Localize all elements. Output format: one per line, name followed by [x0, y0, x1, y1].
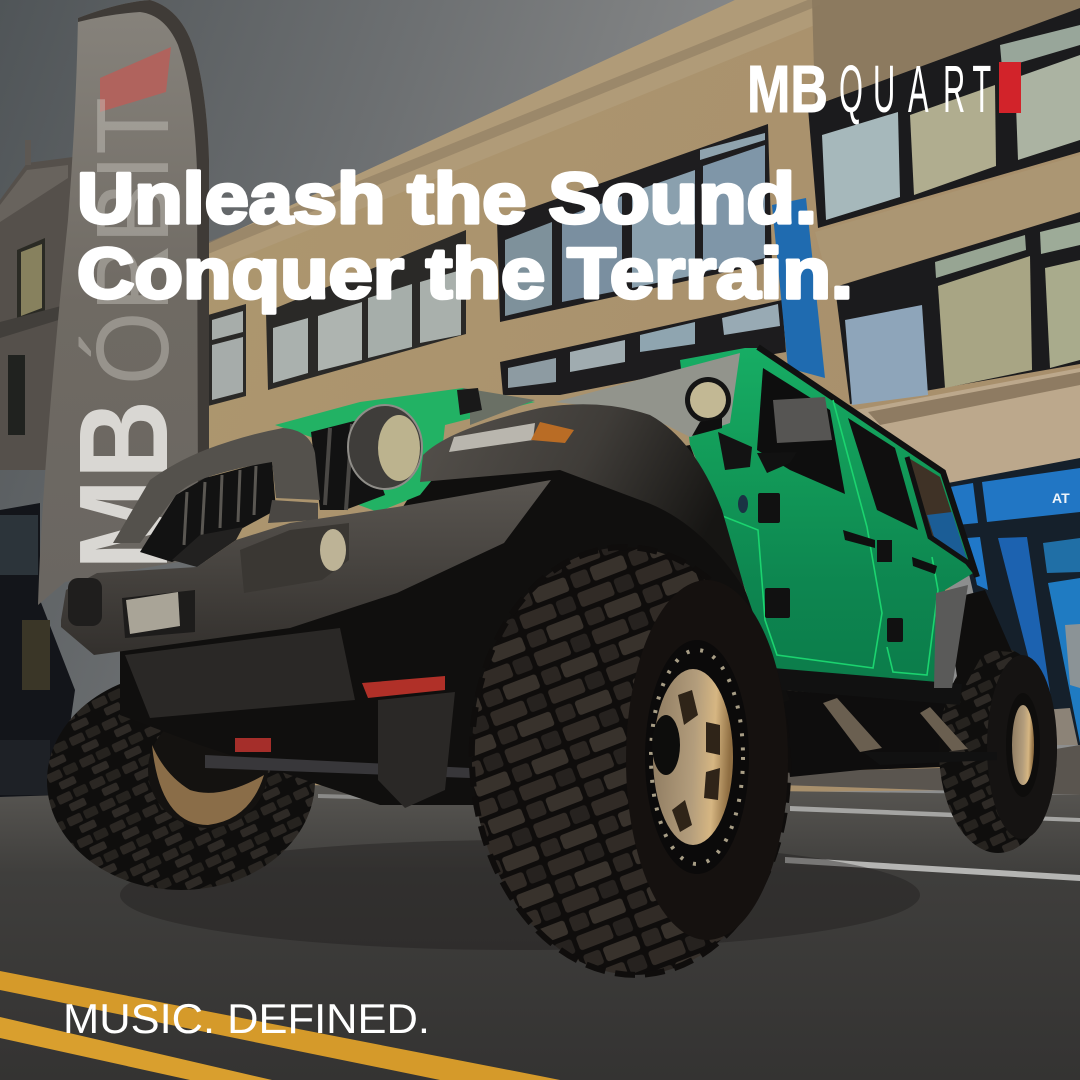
logo red block [999, 62, 1021, 113]
rear underbody [780, 690, 997, 777]
left front tire [47, 672, 315, 890]
logo wordmark MB: MB [747, 52, 828, 127]
body side doors [680, 348, 975, 686]
fog lamp [320, 529, 346, 571]
storefront: AT [1052, 490, 1070, 506]
tagline: MUSIC. DEFINED. [63, 995, 430, 1042]
rear wheel arch [945, 590, 1012, 695]
front tire [461, 539, 799, 983]
bull bar [113, 428, 320, 567]
road lane markings [0, 794, 1080, 1080]
headlight [348, 405, 422, 489]
grille [311, 420, 385, 510]
hardtop edge [758, 347, 977, 577]
cowl hinge [718, 432, 752, 470]
blue tower banner [772, 198, 825, 378]
hood [275, 388, 535, 512]
side windows [757, 368, 975, 572]
banner logo block [100, 47, 171, 112]
parked dark vehicle [0, 503, 75, 797]
headline [77, 160, 853, 314]
gold rim [653, 669, 733, 845]
side mirror [757, 397, 832, 473]
wheel well and dark chassis [120, 445, 790, 808]
side step bars [823, 698, 997, 765]
banner dark edge [78, 0, 209, 510]
banner wordmark: ÓRBIT [75, 97, 190, 385]
feather banner [38, 0, 209, 605]
rocker panel [773, 668, 962, 705]
headline line 1: Unleash the Sound. [77, 160, 817, 239]
headline line 2: Conquer the Terrain. [77, 235, 853, 314]
road [0, 785, 1080, 1080]
rear fender flare [934, 585, 968, 688]
storefront [948, 458, 1080, 745]
MB Quart logo [747, 52, 1021, 127]
logo wordmark QUART: QUART [839, 53, 991, 127]
left ornate building [0, 140, 73, 470]
bumper [61, 480, 551, 655]
tow hook recess [68, 578, 102, 626]
roof light [685, 377, 731, 436]
building facade [205, 0, 1080, 800]
door seams and handles [720, 400, 938, 675]
hub [652, 715, 680, 775]
winch [122, 590, 195, 638]
jeep [47, 347, 1057, 983]
rim windows [672, 690, 720, 832]
upper-floor windows [208, 8, 1080, 406]
banner MB letters: MB [53, 400, 194, 570]
sidewalk curb [780, 745, 1080, 795]
sidewall [626, 580, 788, 940]
rear tire [939, 647, 1057, 853]
front fender flare [420, 404, 745, 590]
beadlock ring [645, 640, 749, 874]
fog lamp pod [240, 523, 349, 593]
windshield glass [555, 353, 740, 437]
tire shadow [120, 840, 920, 950]
